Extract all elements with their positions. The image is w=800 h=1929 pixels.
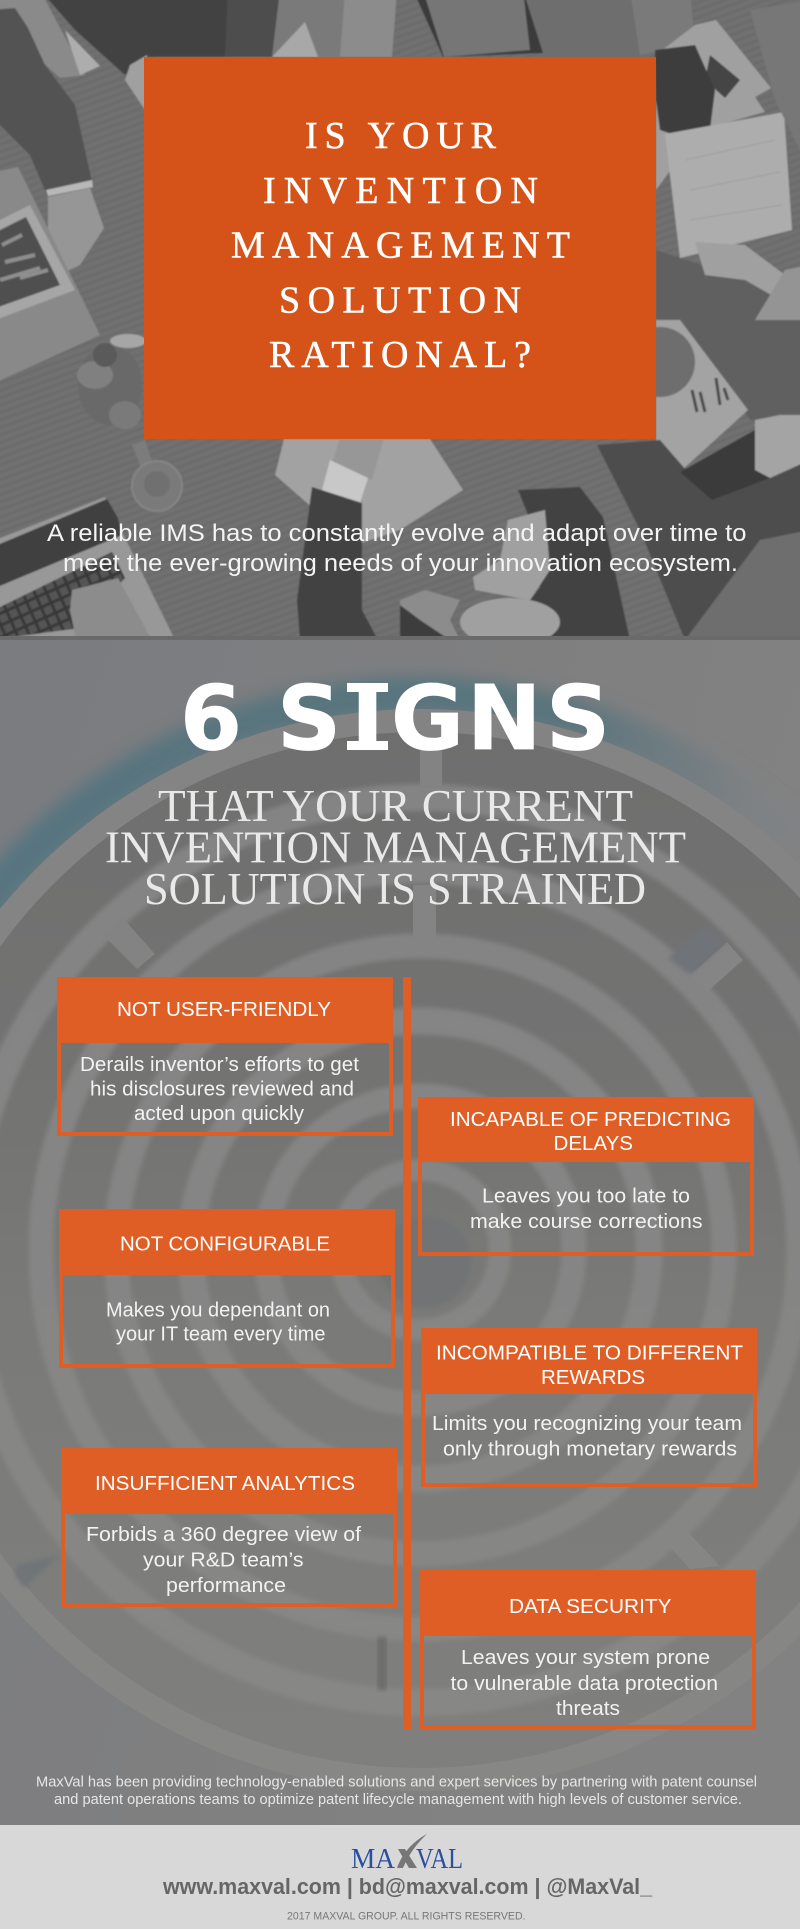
card: not user-friendly: acted upon quickly xyxy=(134,1103,304,1125)
company description xyxy=(36,1774,757,1808)
title text: RATIONAL? xyxy=(269,334,531,376)
card: insufficient analytics: Forbids a 360 degree view of xyxy=(86,1524,361,1546)
company description: and patent operations teams to optimize patent lifecycle management with high levels of customer service. xyxy=(54,1792,742,1808)
title text xyxy=(231,115,570,376)
contact line: www.maxval.com | bd@maxval.com | @MaxVal_ xyxy=(162,1874,653,1899)
card: data security: DATA SECURITY xyxy=(509,1596,672,1618)
card: not user-friendly: Derails inventor’s efforts to get xyxy=(80,1054,359,1076)
card: insufficient analytics xyxy=(61,1448,397,1605)
central timeline bar xyxy=(403,977,411,1729)
card: incompatible to different rewards: REWARDS xyxy=(541,1367,645,1389)
logo: MaxVal: VAL xyxy=(416,1843,463,1875)
hero photo: meeting table seen from above xyxy=(0,0,800,646)
card: incapable of predicting delays: Leaves you too late to xyxy=(482,1186,690,1208)
card: data security xyxy=(420,1570,756,1727)
card: incapable of predicting delays: INCAPABLE OF PREDICTING xyxy=(450,1109,731,1131)
subheading: INVENTION MANAGEMENT xyxy=(105,822,686,872)
card: data security: to vulnerable data protection xyxy=(450,1673,718,1695)
heading: 6 signs: 6 SIGNS xyxy=(0,666,610,770)
card: incapable of predicting delays: make course corrections xyxy=(470,1211,702,1233)
maze background xyxy=(0,640,800,1825)
logo: MaxVal: MA xyxy=(351,1843,395,1875)
card: incapable of predicting delays xyxy=(418,1097,754,1254)
card: data security: Leaves your system prone xyxy=(461,1647,710,1669)
intro text xyxy=(47,520,746,577)
card: incompatible to different rewards xyxy=(421,1328,757,1485)
card: not configurable: NOT CONFIGURABLE xyxy=(120,1234,330,1256)
title text: IS YOUR xyxy=(305,115,497,157)
card: incapable of predicting delays: DELAYS xyxy=(554,1133,633,1155)
title text: INVENTION xyxy=(263,170,538,212)
title text: MANAGEMENT xyxy=(231,224,570,266)
subheading xyxy=(105,781,686,914)
card: insufficient analytics: your R&D team’s xyxy=(143,1550,304,1572)
card: incompatible to different rewards: only through monetary rewards xyxy=(443,1438,737,1460)
card: incompatible to different rewards: INCOMPATIBLE TO DIFFERENT xyxy=(436,1342,743,1364)
subheading: THAT YOUR CURRENT xyxy=(158,781,633,831)
card: data security: threats xyxy=(556,1698,620,1720)
footer band xyxy=(0,1825,800,1929)
card: not configurable xyxy=(59,1209,395,1366)
company description: MaxVal has been providing technology-enabled solutions and expert services by partnering with patent counsel xyxy=(36,1774,757,1790)
intro text: meet the ever-growing needs of your innovation ecosystem. xyxy=(63,550,738,577)
card: not user-friendly: NOT USER-FRIENDLY xyxy=(117,999,331,1021)
logo: MaxVal xyxy=(351,1834,463,1875)
card: not configurable: Makes you dependant on xyxy=(106,1300,330,1322)
intro text: A reliable IMS has to constantly evolve and adapt over time to xyxy=(47,520,746,547)
title panel xyxy=(144,57,656,439)
copyright: 2017 MAXVAL GROUP. ALL RIGHTS RESERVED. xyxy=(287,1910,526,1922)
card: not user-friendly: his disclosures reviewed and xyxy=(90,1078,354,1100)
card: not configurable: your IT team every time xyxy=(116,1324,326,1346)
card: not user-friendly xyxy=(57,977,393,1134)
subheading: SOLUTION IS STRAINED xyxy=(144,864,646,914)
card: incompatible to different rewards: Limits you recognizing your team xyxy=(432,1413,742,1435)
card: insufficient analytics: performance xyxy=(166,1575,286,1597)
title text: SOLUTION xyxy=(279,280,521,322)
card: insufficient analytics: INSUFFICIENT ANALYTICS xyxy=(95,1473,355,1495)
